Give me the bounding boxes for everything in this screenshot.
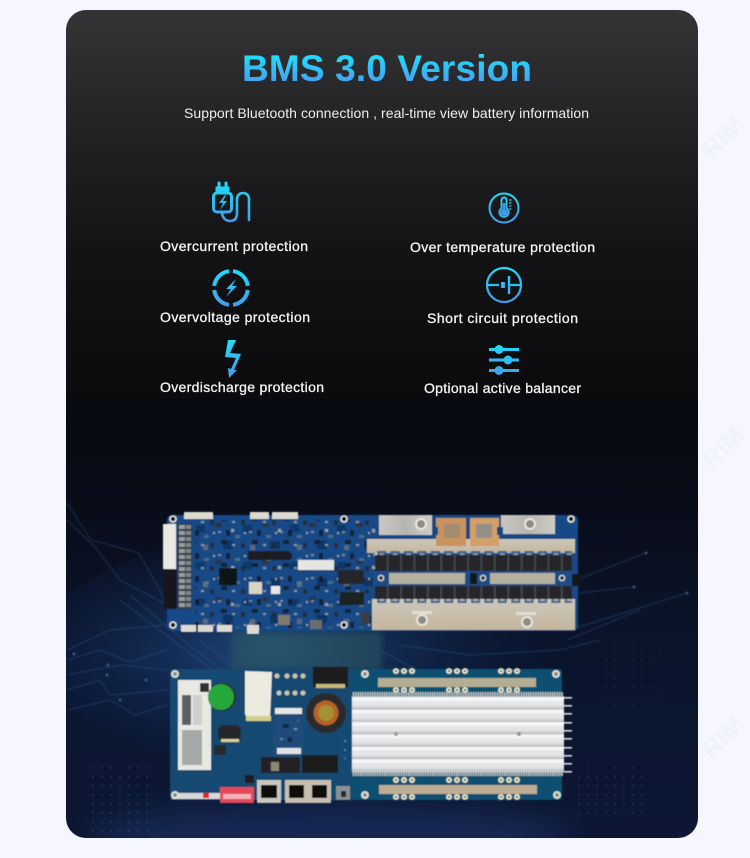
feature: over temperature protection bbox=[410, 194, 595, 255]
feature: short circuit protection bbox=[427, 268, 578, 326]
watermarks: RIM bbox=[695, 109, 750, 164]
label: Over temperature protection bbox=[410, 239, 595, 255]
connectors left edge bbox=[163, 524, 176, 569]
title: BMS 3.0 Version bbox=[242, 48, 532, 89]
green capacitor bbox=[208, 683, 236, 711]
watermarks: RIM bbox=[695, 419, 750, 474]
label sticker bbox=[178, 680, 211, 770]
subtitle: Support Bluetooth connection , real-time view battery information bbox=[184, 105, 589, 121]
panel background: upper dark gradient bbox=[66, 10, 698, 398]
icon: battery charger with cable bbox=[214, 183, 249, 221]
label: Optional active balancer bbox=[424, 380, 581, 396]
metal busbars bbox=[379, 515, 432, 535]
icon: sliders bbox=[489, 345, 519, 375]
icon: lightning bolt with arrow bbox=[225, 340, 241, 378]
chips bbox=[219, 568, 237, 585]
capacitors bbox=[261, 757, 300, 773]
feature: optional active balancer bbox=[424, 345, 581, 396]
watermarks bbox=[695, 109, 750, 764]
feature: overvoltage protection bbox=[160, 271, 310, 325]
feature: overdischarge protection bbox=[160, 340, 324, 395]
photo: BMS board top bbox=[163, 512, 581, 634]
heatsink bbox=[352, 696, 564, 772]
daughter board bbox=[273, 710, 304, 757]
centre strips bbox=[373, 571, 573, 586]
icon: bolt in segmented ring bbox=[214, 271, 248, 305]
label: Overdischarge protection bbox=[160, 379, 324, 395]
feature: overcurrent protection bbox=[160, 183, 308, 254]
toroid coil bbox=[306, 693, 346, 733]
icon: battery symbol in circle bbox=[487, 268, 521, 302]
label: Overvoltage protection bbox=[160, 309, 310, 325]
white resistor bbox=[245, 671, 272, 720]
busbar strips and pads bbox=[378, 678, 536, 687]
small parts and pads bbox=[274, 674, 306, 696]
inductors and transformer bbox=[218, 725, 241, 742]
DIP switch bbox=[220, 787, 254, 803]
photo: BMS board bottom bbox=[170, 667, 572, 803]
MOSFET rows bbox=[375, 555, 572, 571]
corner holes bbox=[172, 671, 560, 798]
label: Short circuit protection bbox=[427, 310, 578, 326]
mounting holes bbox=[170, 516, 574, 628]
panel background: circuit board artwork bbox=[40, 398, 698, 858]
label: Overcurrent protection bbox=[160, 238, 308, 254]
RJ45 ports bbox=[257, 780, 331, 803]
watermarks: RIM bbox=[695, 709, 750, 764]
icon: thermometer in circle bbox=[490, 194, 518, 222]
reset button bbox=[336, 786, 350, 800]
terminal bolts bbox=[416, 519, 535, 627]
